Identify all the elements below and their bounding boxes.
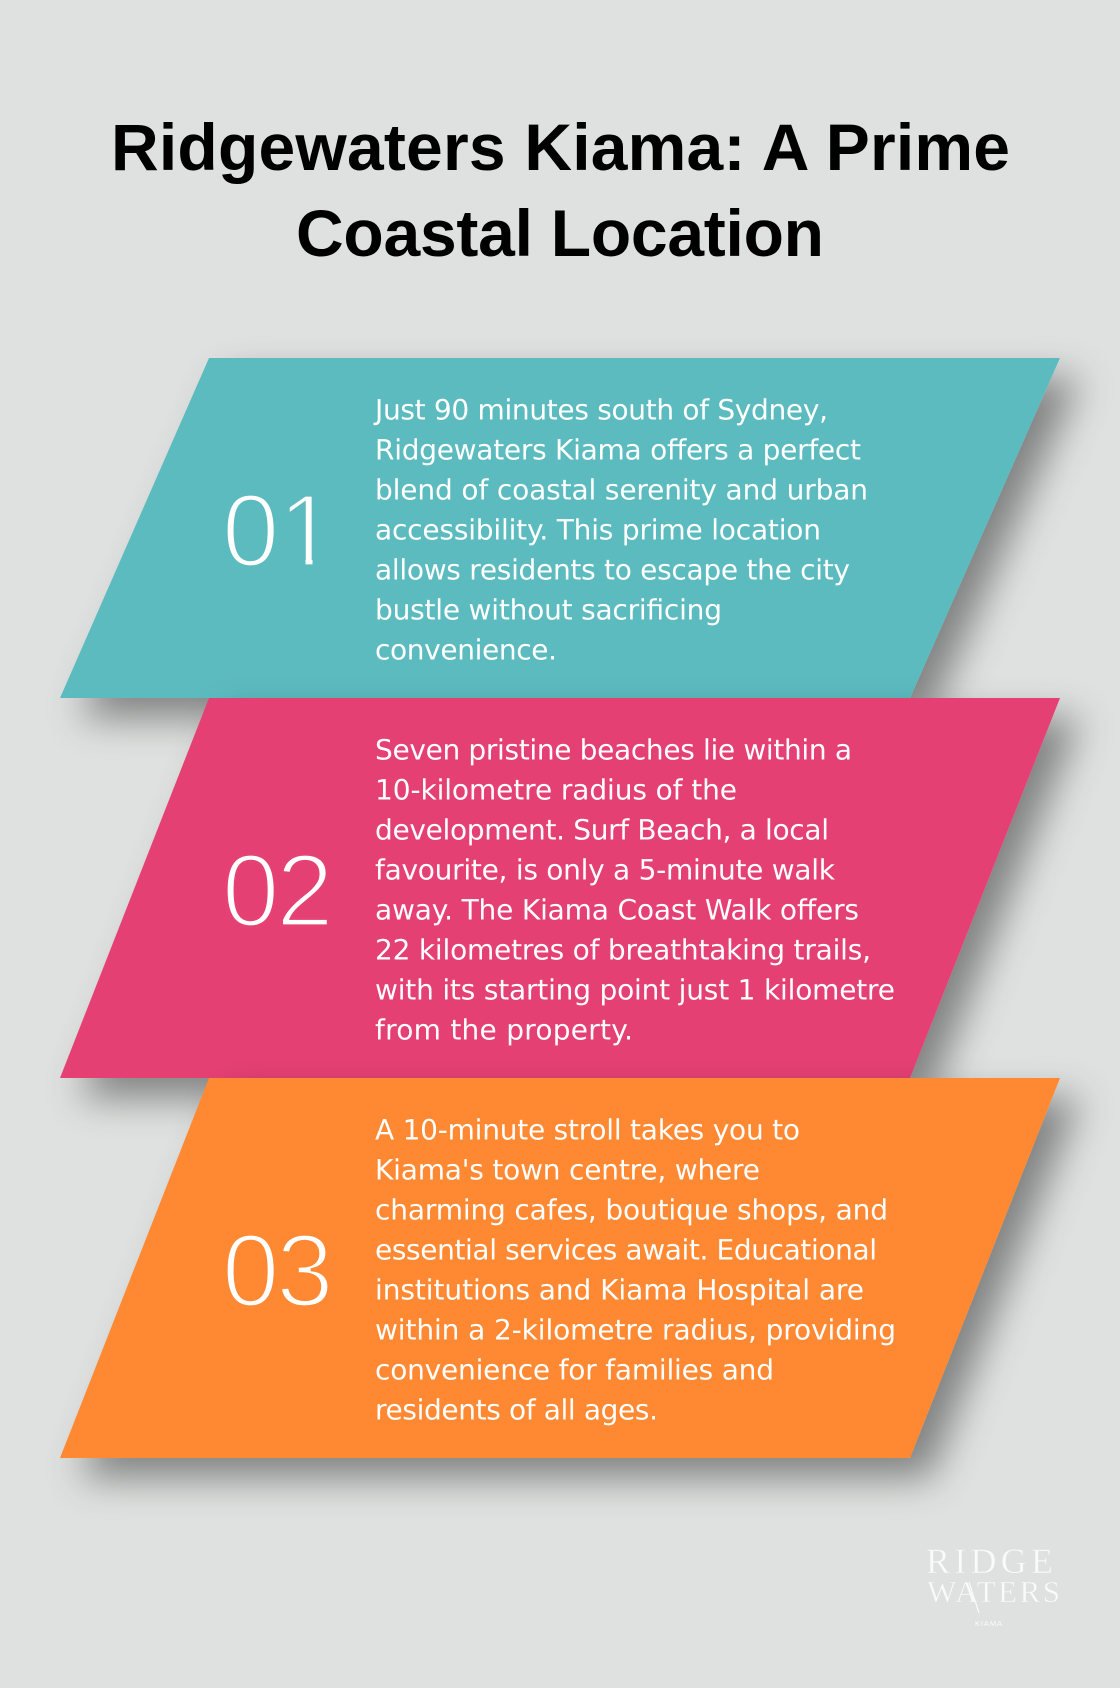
text block 01: Just 90 minutes south of Sydney, [373, 394, 828, 426]
text block 02: development. Surf Beach, a local [375, 814, 829, 846]
text block 02 [375, 734, 895, 1046]
text block 01: blend of coastal serenity and urban [375, 474, 868, 506]
title: Coastal Location [296, 196, 824, 270]
panel: 01 teal [60, 358, 1060, 698]
text block 01: Ridgewaters Kiama offers a perfect [375, 434, 861, 466]
logo: Ridgewaters Kiama [926, 1541, 1060, 1628]
text block 03: Kiama's town centre, where [375, 1154, 760, 1186]
logo: Ridgewaters Kiama: WATERS [927, 1574, 1060, 1609]
text block 01: convenience. [375, 634, 557, 666]
text block 02: from the property. [375, 1014, 633, 1046]
text block 02: away. The Kiama Coast Walk offers [375, 894, 859, 926]
text block 03: A 10-minute stroll takes you to [375, 1114, 800, 1146]
text block 02: 22 kilometres of breathtaking trails, [375, 934, 871, 966]
text block 03: essential services await. Educational [375, 1234, 877, 1266]
text block 03: convenience for families and [375, 1354, 774, 1386]
text block 01: allows residents to escape the city [375, 554, 850, 586]
text block 01 [373, 394, 868, 666]
text block 02: Seven pristine beaches lie within a [375, 734, 852, 766]
text block 03 [375, 1114, 896, 1426]
text block 02: with its starting point just 1 kilometre [375, 974, 895, 1006]
number 01: 01 [222, 473, 336, 588]
text block 03: within a 2-kilometre radius, providing [375, 1314, 896, 1346]
text block 03: residents of all ages. [375, 1394, 658, 1426]
text block 03: charming cafes, boutique shops, and [375, 1194, 888, 1226]
title [111, 110, 1010, 270]
number 02: 02 [222, 833, 334, 948]
text block 01: accessibility. This prime location [375, 514, 821, 546]
text block 01: bustle without sacrificing [375, 594, 722, 626]
panel: 03 orange [60, 1078, 1060, 1458]
number 03: 03 [222, 1213, 334, 1328]
text block 03: institutions and Kiama Hospital are [375, 1274, 864, 1306]
logo: Ridgewaters Kiama: RIDGE [926, 1541, 1053, 1581]
panel: 02 pink [60, 698, 1060, 1078]
logo: Ridgewaters Kiama: KIAMA [975, 1619, 1002, 1628]
text block 02: 10-kilometre radius of the [375, 774, 737, 806]
text block 02: favourite, is only a 5-minute walk [375, 854, 836, 886]
title: Ridgewaters Kiama: A Prime [111, 110, 1010, 184]
